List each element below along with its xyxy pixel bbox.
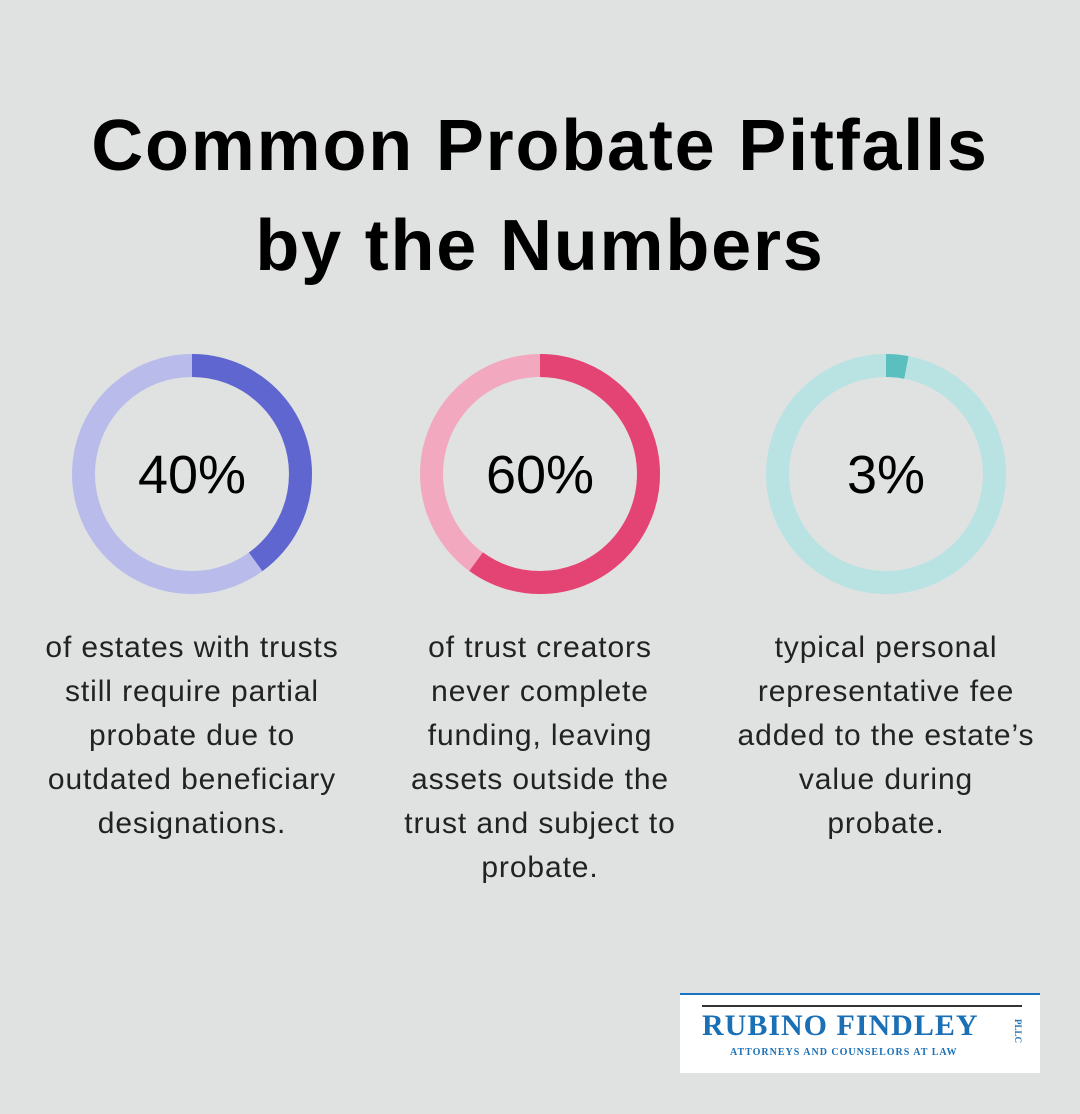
title — [91, 106, 989, 286]
logo: PLLC — [1013, 1019, 1023, 1043]
caption: 3%: typical personal — [775, 631, 997, 664]
donut: 60%: 60% — [486, 445, 594, 505]
caption: 3%: added to the estate’s — [738, 719, 1034, 752]
caption: 40%: still require partial — [65, 675, 319, 708]
title: Common Probate Pitfalls — [91, 106, 989, 186]
donut: 40% — [72, 354, 312, 594]
caption: 40%: designations. — [98, 807, 286, 840]
donut: 3%: 3% — [847, 445, 925, 505]
caption: 3%: value during — [799, 763, 973, 796]
caption: 60%: assets outside the — [411, 763, 669, 796]
caption: 60%: of trust creators — [428, 631, 652, 664]
caption: 60%: probate. — [481, 851, 599, 884]
logo: RUBINO FINDLEY — [702, 1009, 979, 1042]
caption: 40%: outdated beneficiary — [48, 763, 336, 796]
caption: 40%: probate due to — [89, 719, 295, 752]
caption: 3% — [738, 631, 1034, 840]
caption: 3%: probate. — [827, 807, 945, 840]
caption: 40% — [45, 631, 339, 840]
donut: 40%: 40% — [138, 445, 246, 505]
caption: 60%: never complete — [431, 675, 649, 708]
logo: ATTORNEYS AND COUNSELORS AT LAW — [730, 1047, 958, 1058]
caption: 3%: representative fee — [758, 675, 1014, 708]
title: by the Numbers — [255, 206, 825, 286]
caption: 40%: of estates with trusts — [45, 631, 339, 664]
donut: 60% — [420, 354, 660, 594]
logo — [680, 993, 1040, 1073]
caption: 60%: funding, leaving — [428, 719, 652, 752]
caption: 60% — [404, 631, 676, 884]
caption: 60%: trust and subject to — [404, 807, 676, 840]
donut: 3% — [766, 354, 1006, 594]
